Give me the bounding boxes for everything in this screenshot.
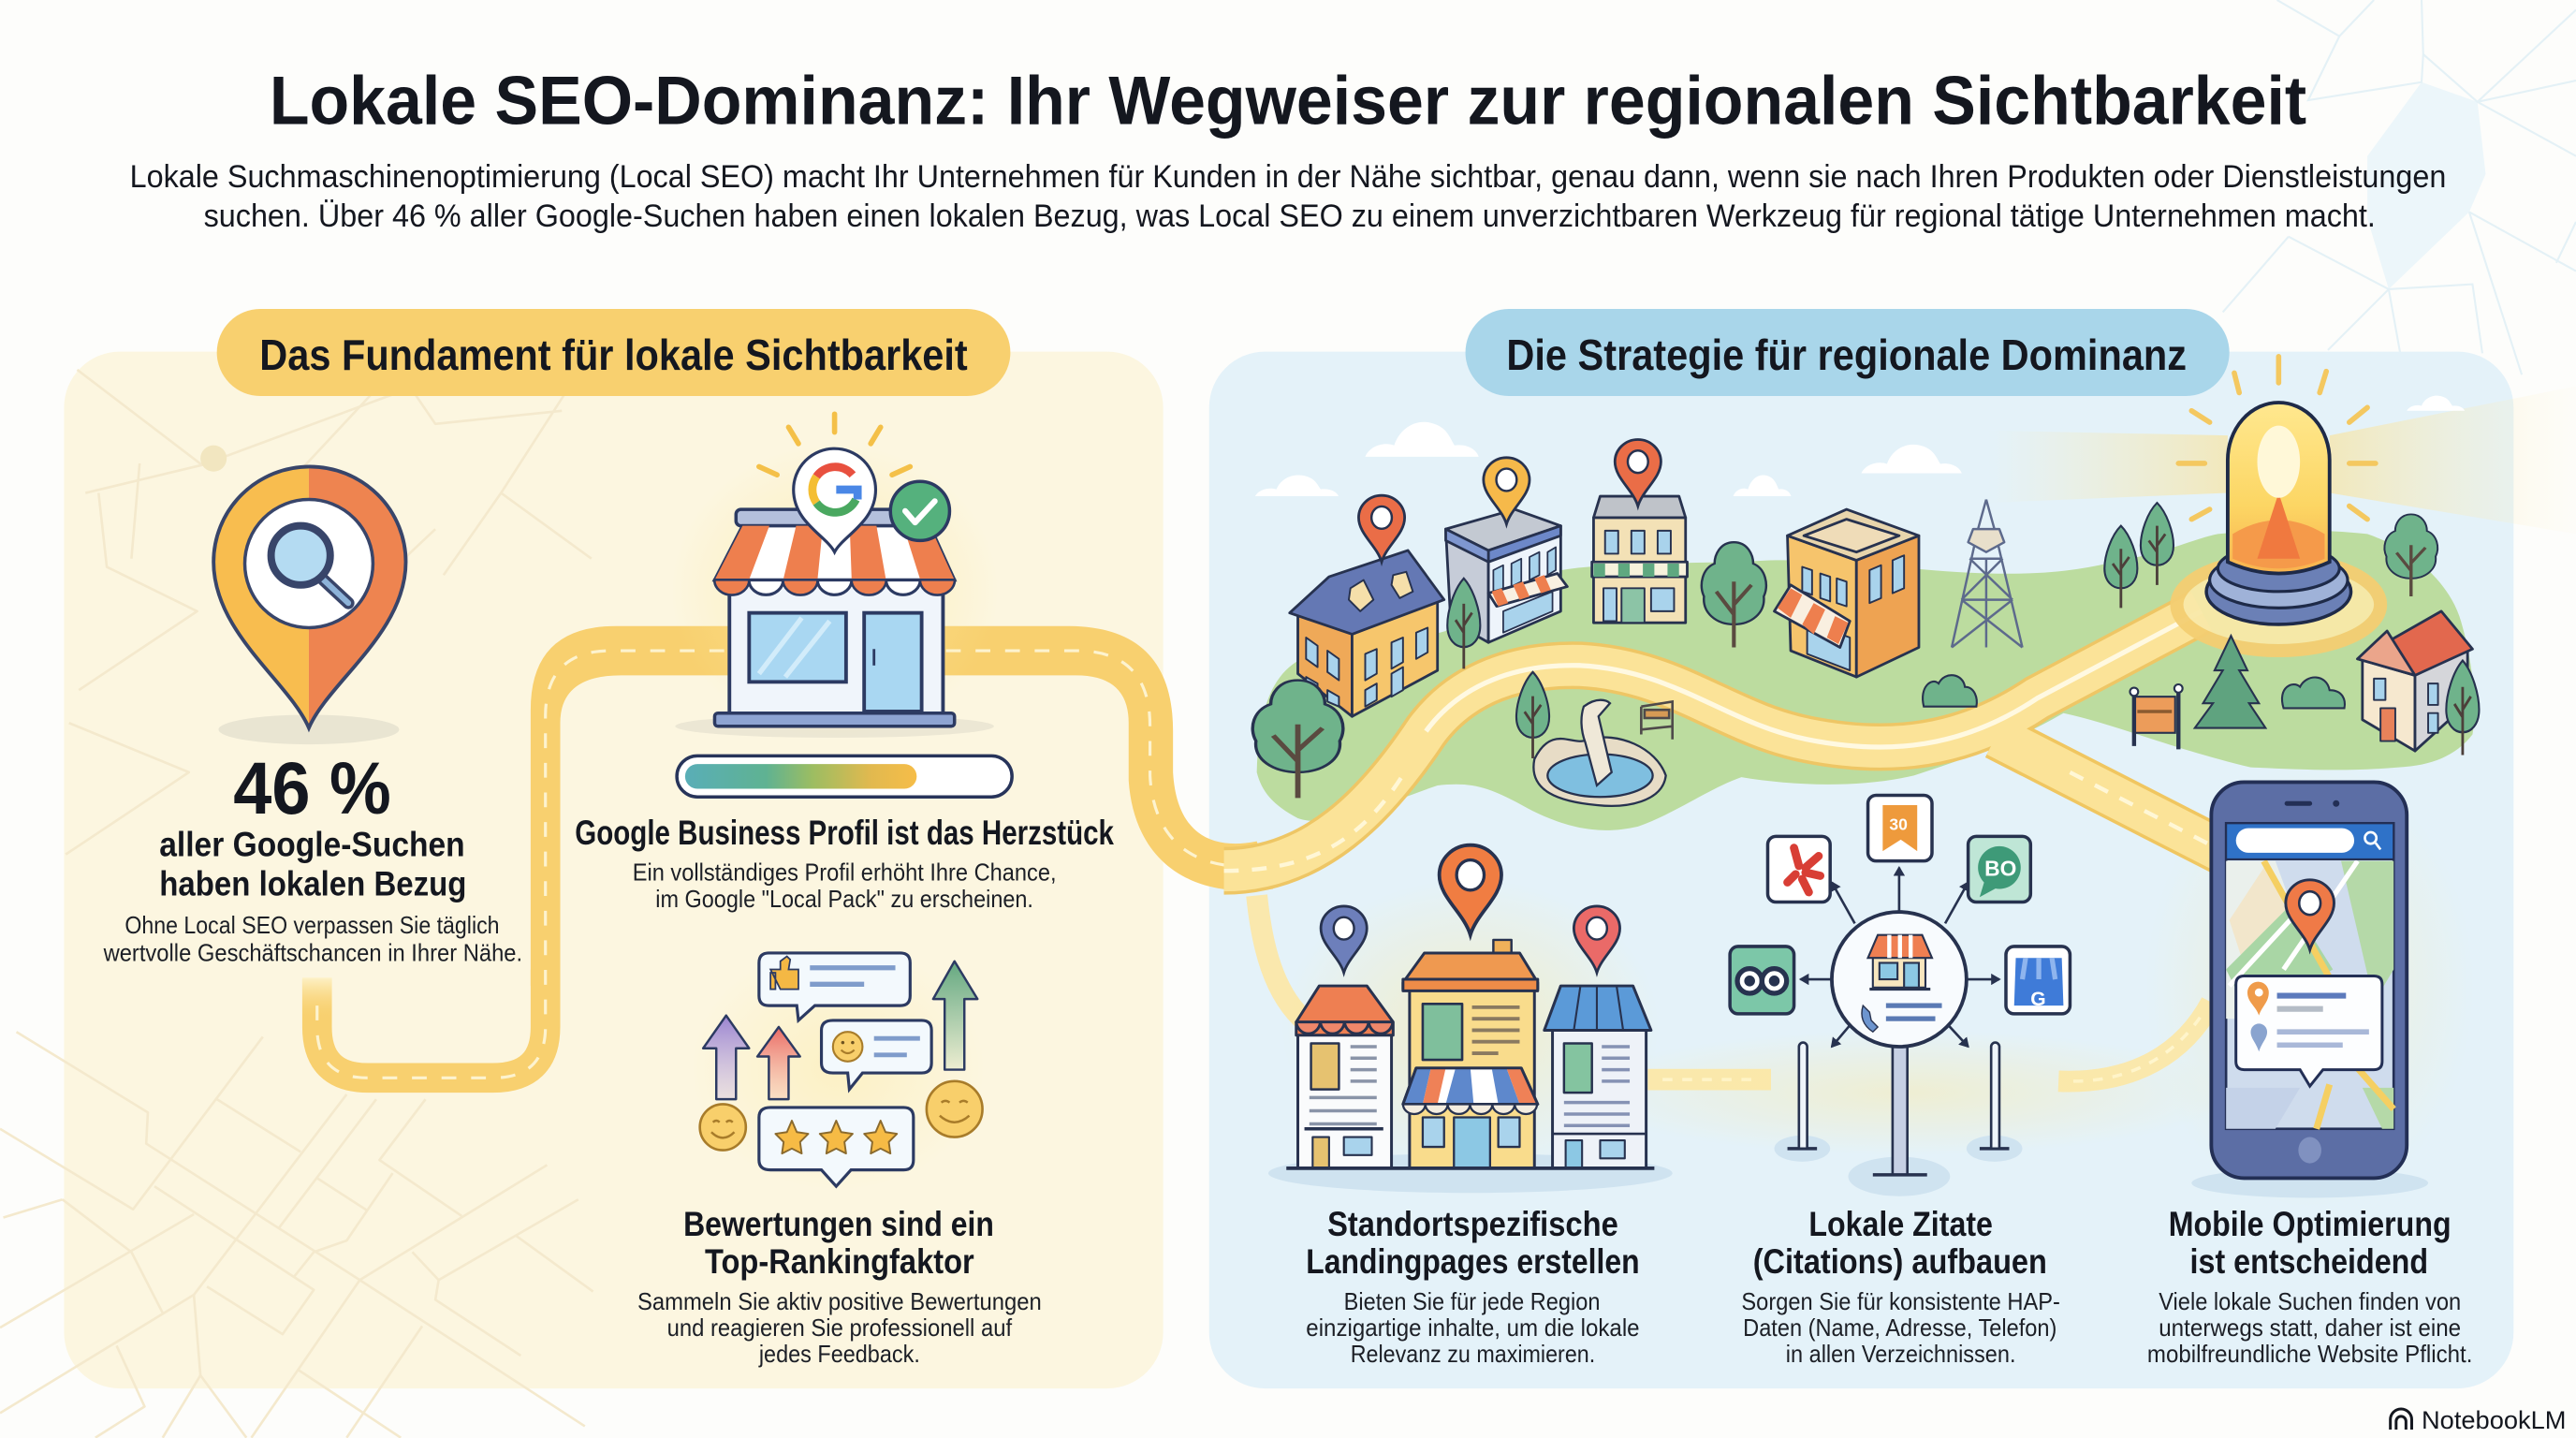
office building <box>1445 509 1567 642</box>
left building <box>1296 986 1393 1168</box>
corner building <box>1775 509 1919 677</box>
logo: NotebookLM: NotebookLM <box>2422 1405 2566 1434</box>
text block: citations: Daten (Name, Adresse, Telefon) <box>1743 1315 2056 1342</box>
text block: citations: Lokale Zitate <box>1808 1205 1993 1243</box>
clouds <box>1255 396 2465 496</box>
icon: citations hub <box>1730 795 2070 1196</box>
phone glow <box>2145 764 2474 1208</box>
tile: yelp <box>1767 836 1830 902</box>
radio tower <box>1952 500 2023 648</box>
bush right <box>2282 678 2345 708</box>
stat: 46 % <box>103 747 522 967</box>
spokes with arrows <box>1801 868 1999 1047</box>
house with blue roof <box>1290 550 1444 716</box>
road: foundation path <box>302 626 1273 1078</box>
text block: intro <box>130 159 2446 234</box>
text block: landing pages: Landingpages erstellen <box>1306 1242 1640 1281</box>
panel: strategy background <box>1209 352 2513 1388</box>
text block: intro: suchen. Über 46 % aller Google-Suchen haben einen lokalen Bezug, was Local SEO zu einem unverzichtbaren Werkzeug für regional tätige Unternehmen macht. <box>204 198 2376 234</box>
text block: mobile: unterwegs statt, daher ist eine <box>2159 1315 2461 1342</box>
text block: intro: Lokale Suchmaschinenoptimierung (Local SEO) macht Ihr Unternehmen für Kunden in der Nähe sichtbar, genau dann, wenn sie nach Ihren Produkten oder Dienstleistungen <box>130 159 2446 195</box>
tile: speech bubble <box>1969 836 2030 902</box>
icon: location pin with magnifier <box>213 466 406 744</box>
tile: bookmark <box>1868 795 1932 861</box>
text block: Bewertungen <box>637 1205 1042 1368</box>
background network top right <box>2223 0 2576 374</box>
text block: Bewertungen: und reagieren Sie professionell auf <box>667 1315 1013 1342</box>
heading pill: strategy <box>1466 309 2230 396</box>
text block: landing pages: einzigartige inhalte, um die lokale <box>1306 1315 1640 1342</box>
heading pill: foundation: Das Fundament für lokale Sichtbarkeit <box>259 330 968 379</box>
bush <box>1923 675 1977 707</box>
hub store <box>1868 935 1932 990</box>
text block: citations <box>1741 1205 2060 1368</box>
scene: wooden fence sign <box>2130 684 2183 749</box>
text block: citations: (Citations) aufbauen <box>1753 1242 2047 1281</box>
road: side branches <box>1257 896 2211 1081</box>
panel: foundation background <box>64 352 1164 1388</box>
stat description: wertvolle Geschäftschancen in Ihrer Nähe. <box>103 941 522 967</box>
text block: Google Business Profil: Google Business Profil ist das Herzstück <box>575 814 1114 852</box>
scene: park bench <box>1641 701 1673 740</box>
text block: Bewertungen: Sammeln Sie aktiv positive Bewertungen <box>637 1289 1042 1315</box>
text block: Bewertungen: jedes Feedback. <box>758 1342 920 1368</box>
text block: mobile <box>2147 1205 2472 1368</box>
stat label: haben lokalen Bezug <box>159 865 466 903</box>
text block: Bewertungen: Top-Rankingfaktor <box>705 1242 974 1281</box>
text block: Google Business Profil <box>575 814 1114 913</box>
text block: mobile: ist entscheidend <box>2190 1242 2428 1281</box>
phone map <box>2226 861 2393 1129</box>
text block: mobile: Mobile Optimierung <box>2169 1205 2452 1243</box>
stat label <box>159 825 466 903</box>
town glow <box>1281 879 1660 1175</box>
stat description <box>103 913 522 967</box>
text block: Google Business Profil: Ein vollständiges Profil erhöht Ihre Chance, <box>633 860 1057 887</box>
green landscape <box>1257 530 2474 830</box>
scene: trees <box>1252 503 2479 798</box>
right building <box>1544 986 1651 1168</box>
stat: 46 %: 46 % <box>233 747 391 829</box>
icon: beacon <box>2178 357 2376 624</box>
house with red roof <box>2358 611 2472 751</box>
pine tree <box>2195 636 2265 728</box>
text block: landing pages: Standortspezifische <box>1327 1205 1618 1243</box>
text block: Bewertungen: Bewertungen sind ein <box>683 1205 994 1243</box>
dot on map <box>200 446 227 472</box>
beacon light beams <box>1988 386 2576 534</box>
shop with green awning <box>1592 496 1687 623</box>
road: strategy main route <box>1224 559 2380 871</box>
stat description: Ohne Local SEO verpassen Sie täglich <box>124 913 500 939</box>
icon: smartphone with map <box>2191 782 2428 1197</box>
tile: speech bubble: BO <box>1984 856 2016 880</box>
icon: landing page buildings <box>1268 845 1673 1193</box>
stat label: aller Google-Suchen <box>159 825 465 863</box>
phone card <box>2236 976 2382 1086</box>
text block: citations: Sorgen Sie für konsistente HAP- <box>1741 1289 2060 1315</box>
text block: landing pages <box>1306 1205 1640 1368</box>
text block: landing pages: Bieten Sie für jede Region <box>1344 1289 1600 1315</box>
icon: review bubbles and rising arrows <box>690 945 986 1191</box>
middle building <box>1403 940 1538 1168</box>
text block: mobile: mobilfreundliche Website Pflicht. <box>2147 1342 2472 1368</box>
text block: Google Business Profil: im Google "Local Pack" zu erscheinen. <box>655 887 1033 913</box>
background street map left <box>0 370 593 1438</box>
scene: town buildings <box>1290 496 2472 751</box>
icon: storefront with Google pin <box>670 414 999 740</box>
tile: owl <box>1730 946 1794 1014</box>
landing page pins <box>1321 845 1620 973</box>
tile: google business: G <box>2030 989 2046 1010</box>
scene: fountain pond <box>1533 700 1666 806</box>
progress bar <box>677 756 1012 797</box>
pins on town buildings <box>1358 439 1661 562</box>
soft glow behind lower scenes <box>1577 1030 2234 1155</box>
heading pill: strategy: Die Strategie für regionale Dominanz <box>1506 330 2187 379</box>
text block: citations: in allen Verzeichnissen. <box>1786 1342 2016 1368</box>
heading: title: Lokale SEO-Dominanz: Ihr Wegweiser zur regionalen Sichtbarkeit <box>270 62 2306 139</box>
heading pill: foundation <box>217 309 1010 396</box>
tile: bookmark: 30 <box>1889 814 1908 833</box>
text block: landing pages: Relevanz zu maximieren. <box>1351 1342 1595 1368</box>
tile: google business <box>2006 946 2070 1014</box>
text block: mobile: Viele lokale Suchen finden von <box>2159 1289 2461 1315</box>
